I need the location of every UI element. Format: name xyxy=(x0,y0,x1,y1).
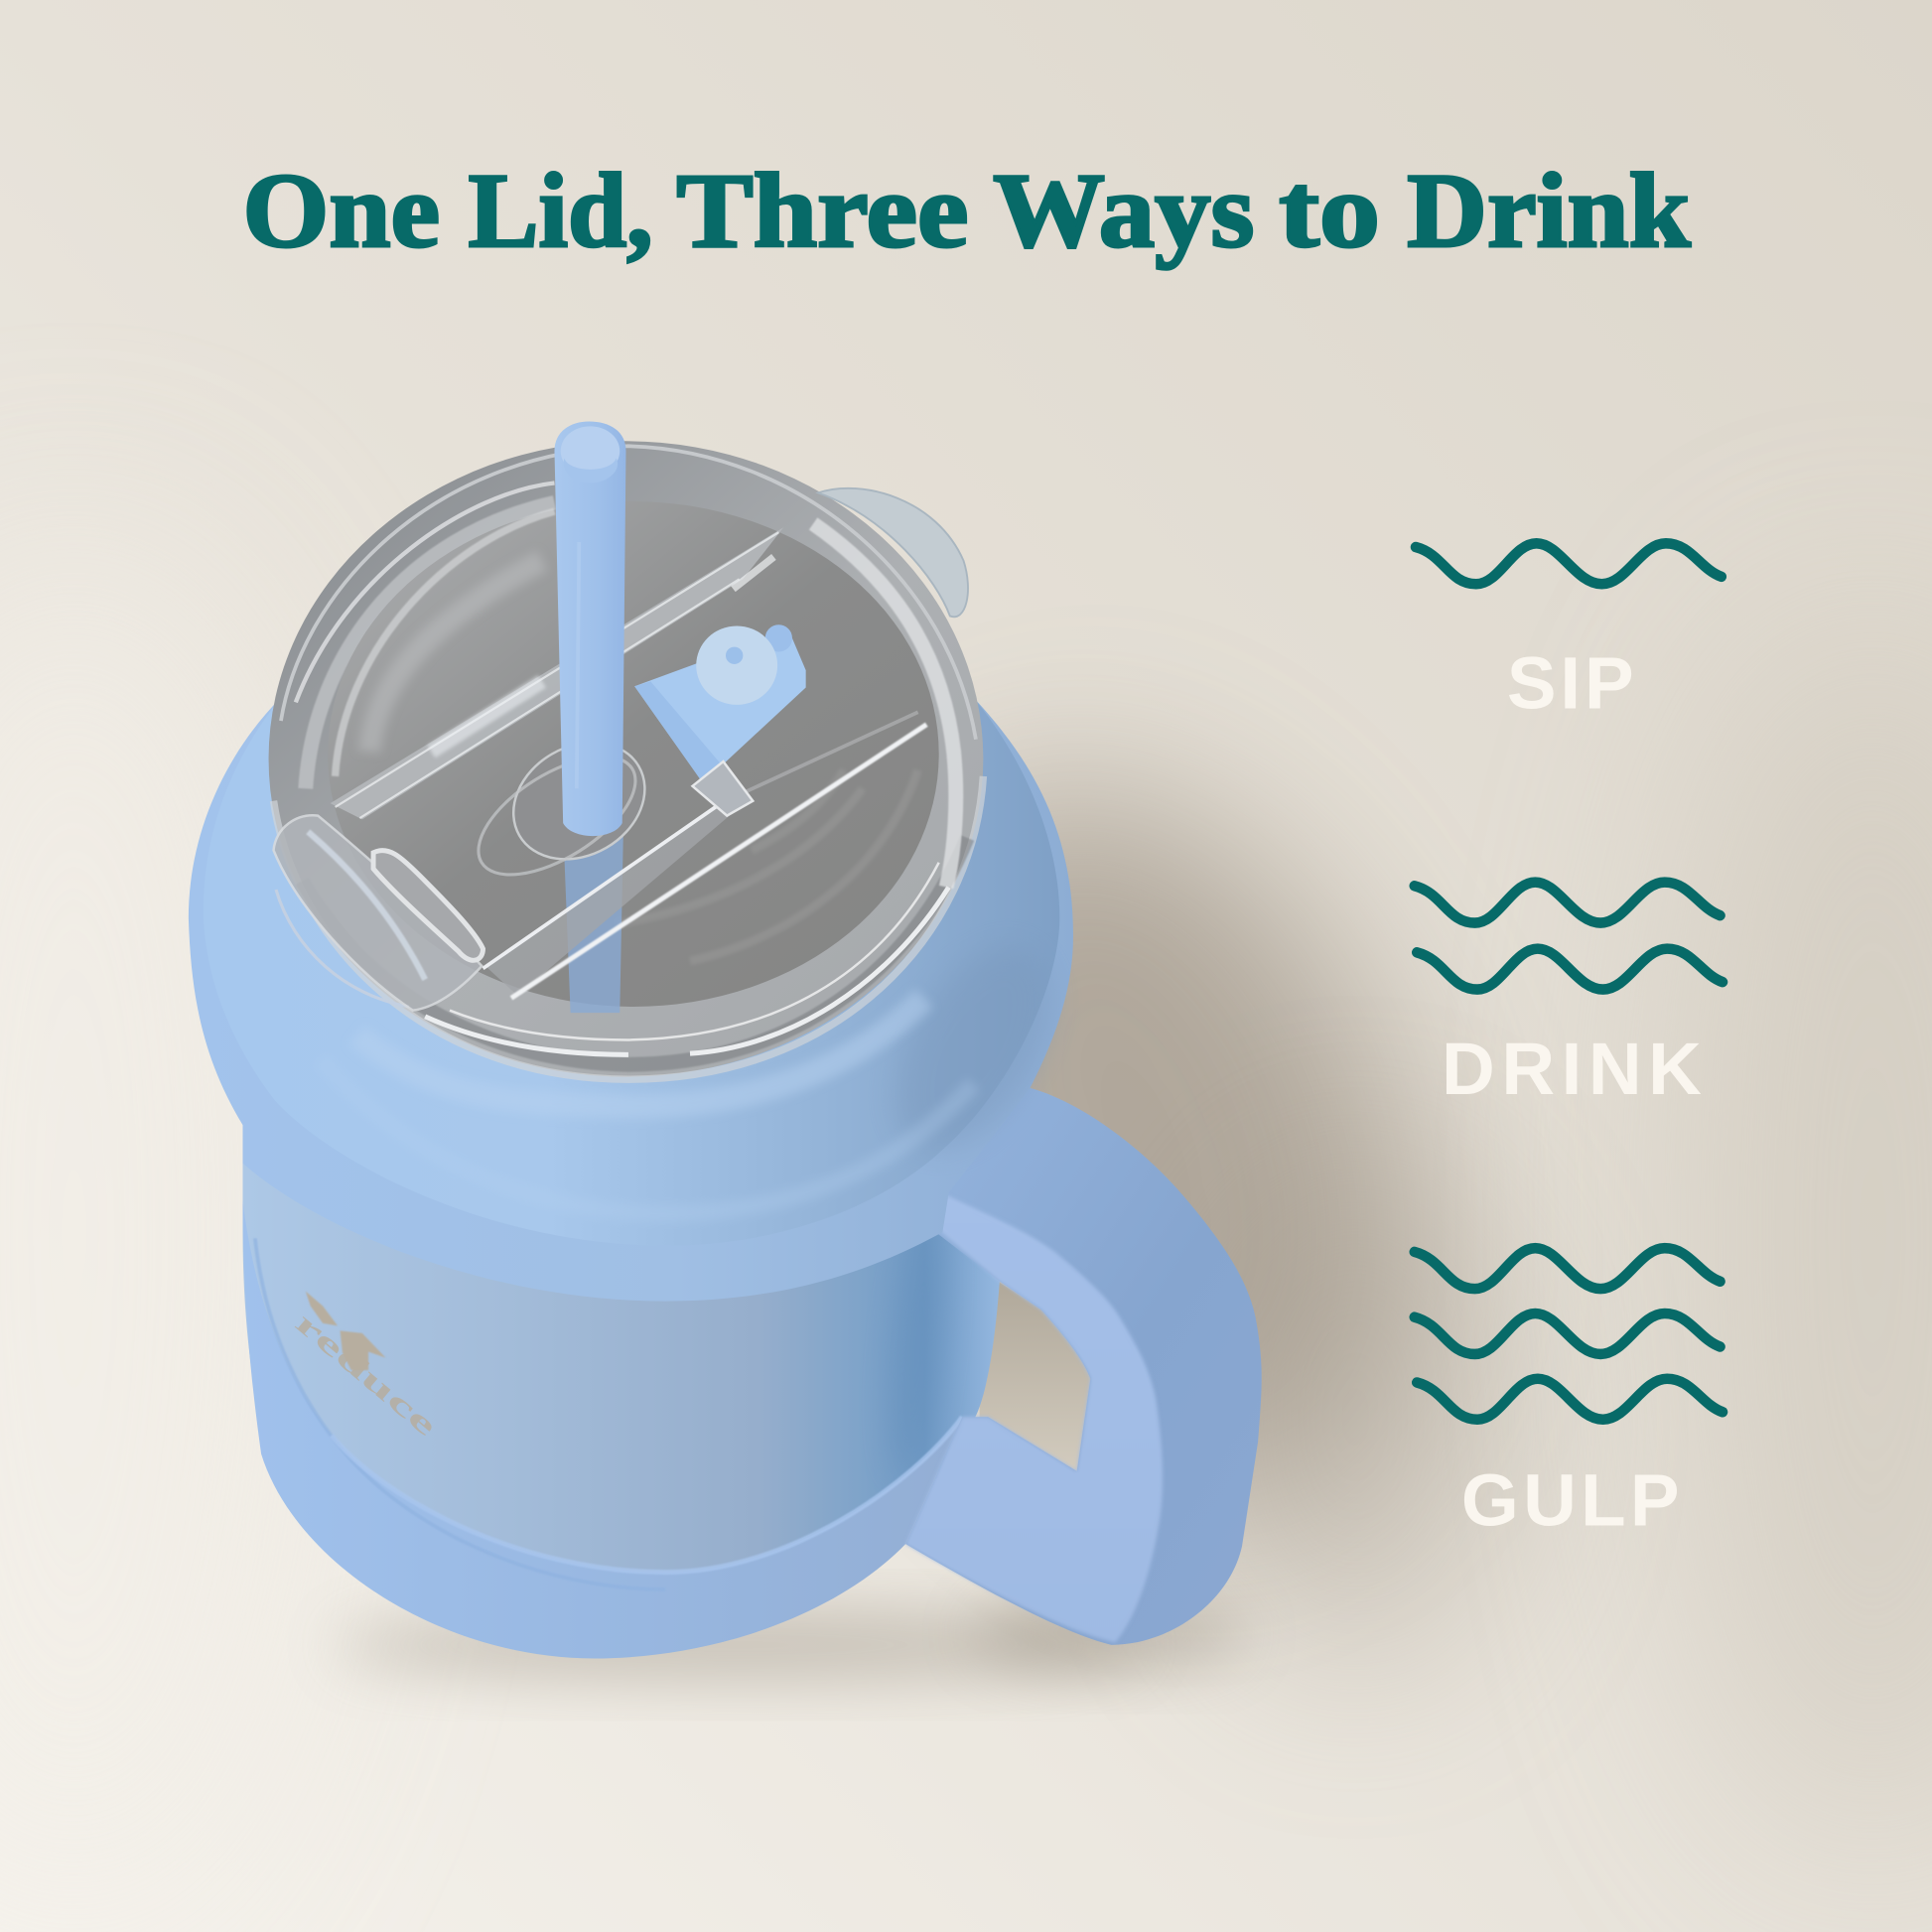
lid xyxy=(269,421,983,1079)
mug shadow xyxy=(333,711,1516,1680)
base band xyxy=(242,1201,962,1658)
handle opening background xyxy=(980,1269,1090,1471)
mug xyxy=(189,421,1262,1658)
lid inner well xyxy=(328,501,939,1007)
tab: right xyxy=(818,488,968,617)
body xyxy=(242,1140,1001,1601)
shoulder dome xyxy=(204,697,1059,1246)
title xyxy=(242,153,1691,270)
title: Lid, xyxy=(469,153,653,270)
handle front face xyxy=(905,1192,1163,1642)
title: to xyxy=(1279,153,1380,270)
oval straw opening xyxy=(492,720,666,883)
lower left sip tab xyxy=(274,815,483,1011)
label: gulp: GULP xyxy=(1461,1458,1680,1541)
tab: lower left xyxy=(276,890,409,1007)
shoulder ring xyxy=(189,697,1073,1302)
label: sip: SIP xyxy=(1507,642,1634,725)
handle xyxy=(905,1088,1262,1645)
logo on mug xyxy=(289,1292,443,1443)
straw under lid xyxy=(563,826,623,1013)
wave icon: sip xyxy=(1416,543,1722,584)
lid rim xyxy=(269,441,983,1077)
title: Three xyxy=(676,153,968,270)
straw xyxy=(554,421,625,836)
label: drink: DRINK xyxy=(1442,1028,1702,1110)
title: One xyxy=(242,153,440,270)
wave icon: drink xyxy=(1415,883,1723,990)
title: Ways xyxy=(993,153,1254,270)
wave icon: gulp xyxy=(1415,1248,1723,1420)
slider bar: upper xyxy=(331,527,783,819)
slider track: lower xyxy=(486,803,730,996)
title: Drink xyxy=(1407,153,1691,270)
clip xyxy=(692,761,753,816)
logo on mug: reduce xyxy=(289,1306,443,1443)
stopper xyxy=(634,624,806,778)
